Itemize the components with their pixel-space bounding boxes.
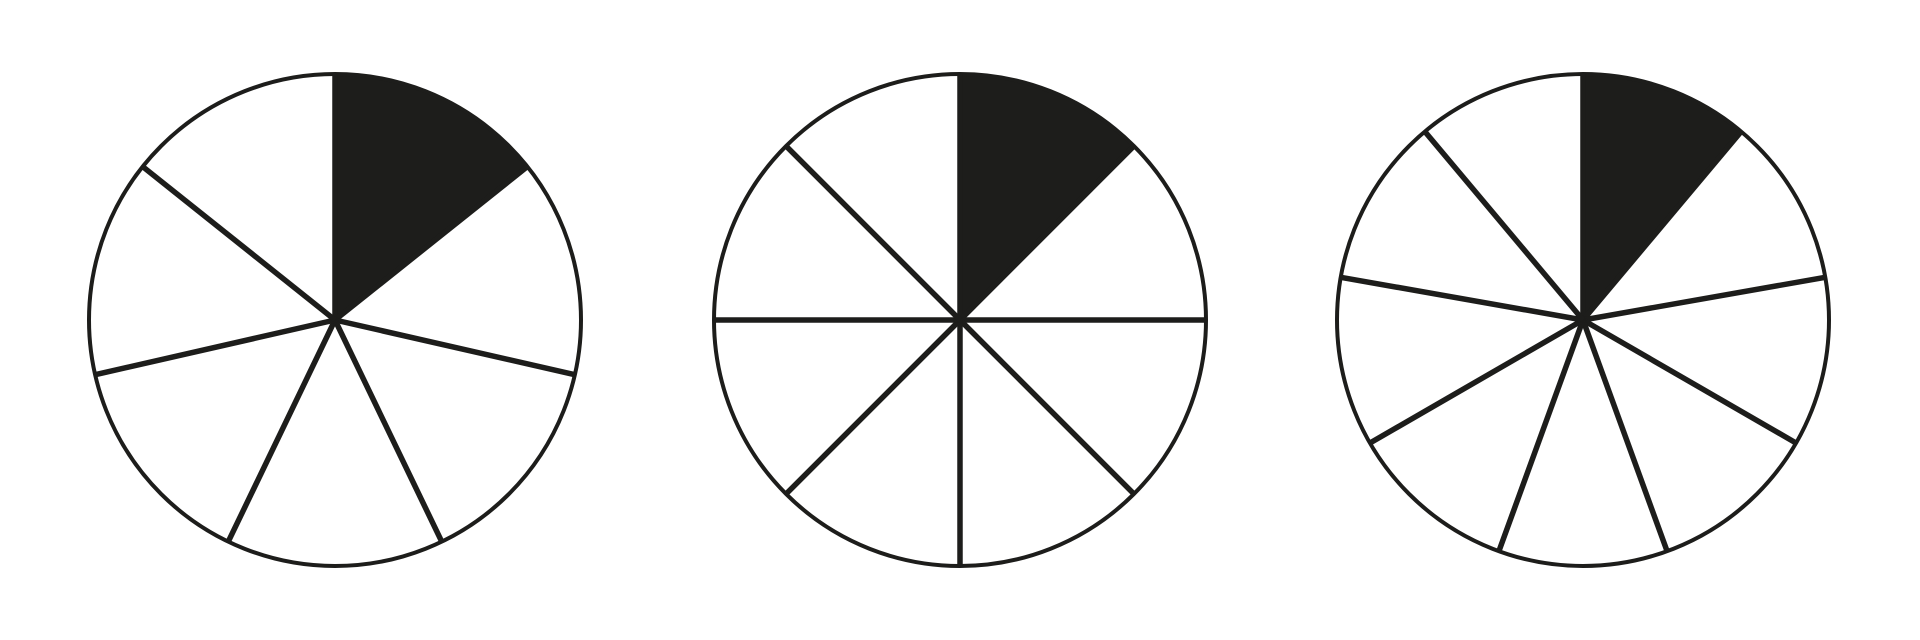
filled segment 1/8 (960, 74, 1134, 320)
filled segment 1/9 (1583, 74, 1741, 320)
pie: 8 segments, one filled (714, 74, 1206, 566)
filled segment 1/7 (335, 74, 527, 320)
pie: 9 segments, one filled (1337, 74, 1829, 566)
pie: 7 segments, one filled (89, 74, 581, 566)
